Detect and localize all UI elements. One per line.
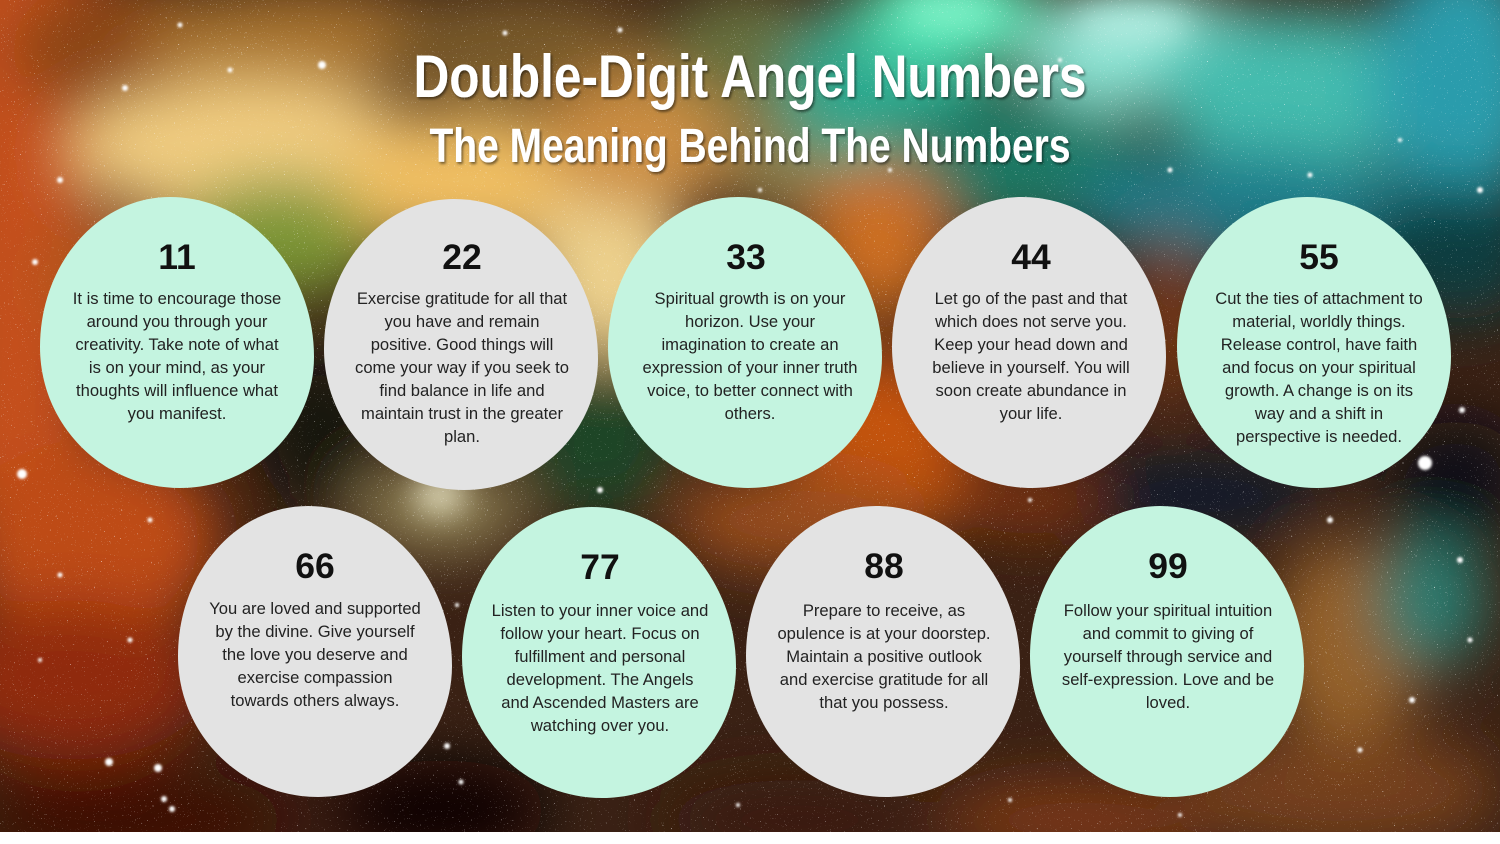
panel: number 33: expression of your inner truth — [643, 358, 857, 377]
panel: number 66: towards others always. — [231, 691, 399, 710]
panel: number 33 — [608, 197, 882, 488]
panel: number 44: believe in yourself. You will — [932, 358, 1130, 377]
panel: number 44: 44 — [1011, 237, 1051, 277]
panel: number 11: creativity. Take note of what — [75, 335, 279, 354]
panel: number 22: come your way if you seek to — [355, 358, 569, 377]
panel: number 11 — [40, 197, 314, 488]
panel: number 77: 77 — [580, 547, 620, 587]
panel: number 55: way and a shift in — [1254, 404, 1383, 423]
panel: number 22: you have and remain — [385, 312, 539, 331]
panel: number 77 — [462, 507, 736, 798]
panel: number 44: Let go of the past and that — [935, 289, 1128, 308]
title block — [414, 43, 1086, 173]
panel: number 77: Listen to your inner voice and — [492, 601, 708, 620]
panel: number 66 — [178, 506, 452, 797]
panel: number 11: 11 — [158, 237, 196, 277]
panel: number 88: opulence is at your doorstep. — [777, 624, 991, 643]
panel: number 66: exercise compassion — [238, 668, 392, 687]
panel: number 88: and exercise gratitude for all — [780, 670, 988, 689]
panel: number 11: It is time to encourage those — [73, 289, 281, 308]
panel: number 44 — [892, 197, 1166, 488]
panel: number 44: Keep your head down and — [934, 335, 1128, 354]
panel: number 99: 99 — [1148, 546, 1188, 586]
panel: number 22: maintain trust in the greater — [361, 404, 563, 423]
panel: number 11: is on your mind, as your — [89, 358, 266, 377]
panel: number 44: soon create abundance in — [936, 381, 1126, 400]
panel: number 33: others. — [725, 404, 775, 423]
panel: number 55: growth. A change is on its — [1225, 381, 1413, 400]
panel: number 33: horizon. Use your — [685, 312, 815, 331]
panel: number 22: positive. Good things will — [371, 335, 553, 354]
panel: number 11: thoughts will influence what — [76, 381, 278, 400]
panel: number 55: and focus on your spiritual — [1222, 358, 1416, 377]
panel: number 77: and Ascended Masters are — [501, 693, 699, 712]
panel: number 55: 55 — [1299, 237, 1339, 277]
panel: number 22: 22 — [442, 237, 482, 277]
panel: number 99: Follow your spiritual intuition — [1064, 601, 1272, 620]
panel: number 99: and commit to giving of — [1083, 624, 1254, 643]
panel: number 88: 88 — [864, 546, 904, 586]
panel: number 33: voice, to better connect with — [647, 381, 853, 400]
panel: number 33: Spiritual growth is on your — [655, 289, 846, 308]
panel: number 66: by the divine. Give yourself — [215, 622, 415, 641]
panel: number 11: you manifest. — [128, 404, 226, 423]
panel: number 33: 33 — [726, 237, 766, 277]
panel: number 77: follow your heart. Focus on — [500, 624, 700, 643]
panel: number 66: You are loved and supported — [209, 599, 421, 618]
panel: number 55: perspective is needed. — [1236, 427, 1402, 446]
panel: number 99: loved. — [1146, 693, 1190, 712]
panel: number 55 — [1177, 197, 1451, 488]
panel: number 99 — [1030, 506, 1304, 797]
panel: number 88: Maintain a positive outlook — [786, 647, 982, 666]
panel: number 99: yourself through service and — [1064, 647, 1272, 666]
subtitle: The Meaning Behind The Numbers — [430, 120, 1070, 173]
panel: number 44: your life. — [1000, 404, 1062, 423]
panel: number 22 — [324, 199, 598, 490]
panel: number 55: material, worldly things. — [1232, 312, 1406, 331]
panel: number 44: which does not serve you. — [934, 312, 1127, 331]
panel: number 22: find balance in life and — [379, 381, 545, 400]
panel: number 33: imagination to create an — [661, 335, 839, 354]
panel: number 77: development. The Angels — [507, 670, 693, 689]
panel: number 66: 66 — [295, 546, 335, 586]
panel: number 22: Exercise gratitude for all that — [357, 289, 568, 308]
panel: number 11: around you through your — [87, 312, 268, 331]
panel: number 77: watching over you. — [530, 716, 669, 735]
main title: Double-Digit Angel Numbers — [414, 43, 1086, 110]
panel: number 66: the love you deserve and — [222, 645, 408, 664]
panel: number 88: that you possess. — [819, 693, 949, 712]
panel: number 88 — [746, 506, 1020, 797]
panel: number 88: Prepare to receive, as — [803, 601, 965, 620]
panel: number 55: Release control, have faith — [1221, 335, 1417, 354]
panel: number 22: plan. — [444, 427, 480, 446]
panel: number 99: self-expression. Love and be — [1062, 670, 1274, 689]
panel: number 55: Cut the ties of attachment to — [1215, 289, 1423, 308]
panel: number 77: fulfillment and personal — [515, 647, 685, 666]
